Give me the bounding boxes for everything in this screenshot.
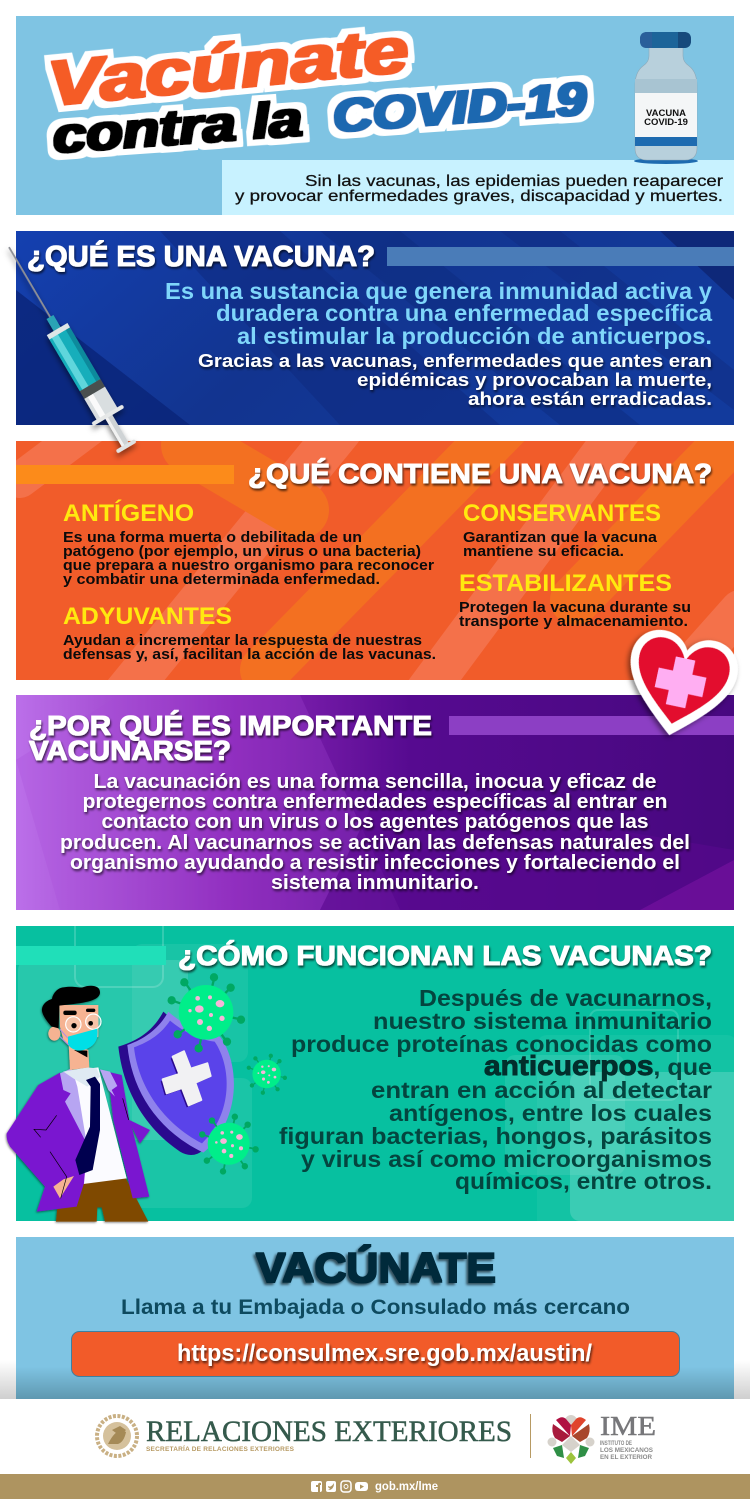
text: embassy: Llama a tu Embajada o Consulado más cercano: [121, 1296, 630, 1319]
panel: what is a vaccine: [16, 231, 734, 425]
heading: VACUNARSE?: [29, 735, 231, 766]
text: website: gob.mx/lme: [375, 1481, 438, 1493]
icon: vaccine vial: COVID-19: [644, 117, 688, 128]
icon: vaccine vial: [634, 32, 698, 164]
text block: antígeno: ANTÍGENO: [63, 499, 194, 527]
virus small: [247, 1054, 286, 1094]
text block: adyuvantes: ADYUVANTES: [63, 603, 232, 630]
text block: how it works: produce proteínas conocidas como: [291, 1031, 712, 1057]
panel: what a vaccine contains: [16, 441, 734, 680]
title: Vacúnate: Vacúnate: [44, 14, 412, 120]
logo: IME symbol: [548, 1415, 594, 1464]
panel: header: [16, 14, 734, 215]
text block: importance: producen. Al vacunarnos se activan las defensas naturales del: [60, 832, 690, 854]
text block: estabilizantes: Protegen la vacuna durante su: [459, 600, 691, 616]
text block: definition: al estimular la producción de anticuerpos.: [237, 323, 712, 349]
text block: how it works: y virus así como microorganismos: [301, 1146, 712, 1172]
icon: heart with cross: [617, 624, 743, 746]
text block: how it works: Después de vacunarnos,: [419, 985, 712, 1011]
text block: how it works: [279, 985, 712, 1194]
heading: ¿POR QUÉ ES IMPORTANTE: [29, 710, 432, 741]
doctor: [7, 986, 150, 1222]
text block: how it works: nuestro sistema inmunitario: [373, 1008, 712, 1034]
text block: conservantes: Garantizan que la vacuna: [463, 530, 658, 546]
text block: antígeno: Es una forma muerta o debilitada de un: [63, 530, 362, 546]
footer bar: [0, 1474, 750, 1499]
text block: estabilizantes: transporte y almacenamiento.: [459, 614, 688, 630]
text block: eradicated diseases: epidémicas y provocaban la muerte,: [357, 369, 712, 390]
heading: VACÚNATE: [256, 1243, 496, 1291]
text block: eradicated diseases: ahora están erradicadas.: [468, 388, 712, 409]
text block: estabilizantes: ESTABILIZANTES: [459, 570, 672, 597]
logo text: Relaciones Exteriores: RELACIONES EXTERIORES: [146, 1415, 512, 1448]
text block: adyuvantes: defensas y, así, facilitan la acción de las vacunas.: [63, 647, 436, 663]
text block: antígeno: patógeno (por ejemplo, un virus o una bacteria): [63, 544, 421, 560]
heading: ¿QUÉ ES UNA VACUNA?: [27, 239, 375, 273]
logo text: IME: [600, 1411, 656, 1461]
panel: why vaccinate: [16, 695, 734, 910]
text block: conservantes: CONSERVANTES: [463, 500, 661, 527]
icon: vaccine vial: VACUNA: [646, 108, 686, 119]
icons: social: [311, 1481, 368, 1492]
text block: importance: protegernos contra enfermedades específicas al entrar en: [82, 791, 668, 813]
button: url: [72, 1332, 680, 1376]
footer: logos: [97, 1411, 656, 1464]
text block: how it works: antígenos, entre los cuales: [389, 1100, 712, 1126]
logo: seal: [97, 1416, 137, 1456]
logo text: IME: IME: [600, 1411, 656, 1441]
icon: syringe: [0, 238, 143, 457]
text block: definition: Es una sustancia que genera inmunidad activa y: [165, 278, 712, 304]
text block: adyuvantes: [63, 603, 436, 663]
text block: eradicated diseases: [198, 350, 712, 409]
subtitle box: [222, 160, 734, 215]
subtitle box: y provocar enfermedades graves, discapacidad y muertes.: [235, 188, 723, 205]
panel: call to action: [0, 1237, 750, 1399]
text block: antígeno: que prepara a nuestro organismo para reconocer: [63, 558, 434, 574]
text block: importance: [60, 771, 690, 894]
text block: importance: sistema inmunitario.: [271, 872, 479, 894]
text block: antígeno: [63, 499, 434, 588]
heading: ¿QUÉ CONTIENE UNA VACUNA?: [248, 458, 712, 489]
text block: conservantes: mantiene su eficacia.: [463, 544, 624, 560]
panel: how vaccines work: [7, 915, 750, 1235]
text block: definition: duradera contra una enfermedad específica: [216, 300, 712, 326]
illustration: doctor with shield and viruses: [7, 974, 286, 1222]
heading: ¿CÓMO FUNCIONAN LAS VACUNAS?: [178, 940, 712, 971]
title: contra la: contra la: [51, 91, 304, 164]
virus large: [169, 974, 244, 1051]
text block: importance: contacto con un virus o los agentes patógenos que las: [102, 811, 648, 833]
text block: how it works: químicos, entre otros.: [455, 1168, 712, 1194]
title: COVID-19: COVID-19: [331, 72, 589, 142]
shield: [118, 1012, 234, 1155]
logo text: IME: LOS MEXICANOS: [600, 1448, 653, 1454]
text block: how it works: figuran bacterias, hongos, parásitos: [279, 1123, 712, 1149]
text block: eradicated diseases: Gracias a las vacunas, enfermedades que antes eran: [198, 350, 712, 371]
virus medium: [200, 1114, 258, 1174]
text block: how it works: entran en acción al detectar: [371, 1077, 712, 1103]
text block: how it works: anticuerpos , que: [484, 1050, 712, 1081]
heading: [29, 710, 432, 766]
logo text: IME: EN EL EXTERIOR: [600, 1455, 653, 1461]
text block: conservantes: [463, 500, 661, 560]
text block: importance: La vacunación es una forma sencilla, inocua y eficaz de: [94, 771, 656, 793]
logo text: IME: INSTITUTO DE: [600, 1441, 632, 1447]
text block: importance: organismo ayudando a resistir infecciones y fortaleciendo el: [70, 852, 680, 874]
text block: adyuvantes: Ayudan a incrementar la respuesta de nuestras: [63, 633, 422, 649]
text block: estabilizantes: [459, 570, 691, 630]
button: url: https://consulmex.sre.gob.mx/austin/: [177, 1340, 592, 1367]
text block: antígeno: y combatir una determinada enfermedad.: [63, 572, 380, 588]
subtitle box: Sin las vacunas, las epidemias pueden reaparecer: [305, 173, 724, 190]
footer: logos: SECRETARÍA DE RELACIONES EXTERIORES: [146, 1444, 295, 1453]
text block: definition: [165, 278, 712, 349]
